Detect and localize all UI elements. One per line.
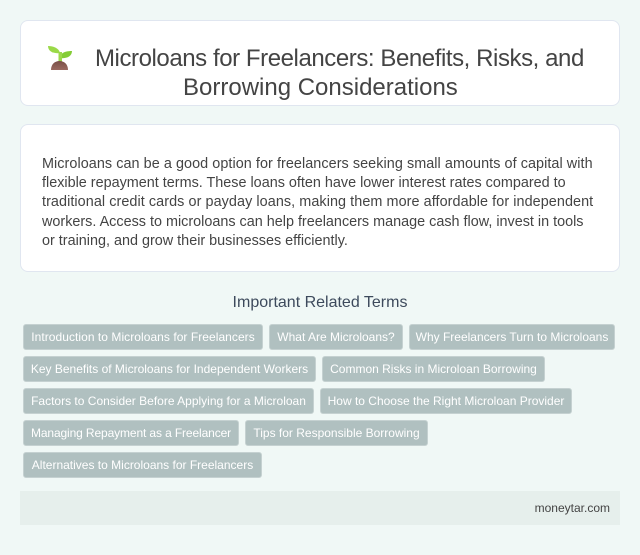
tag	[245, 420, 428, 446]
tag: Key Benefits of Microloans for Independent Workers	[31, 362, 308, 376]
text block: summary: workers. Access to microloans can help freelancers manage cash flow, invest in tools	[42, 214, 584, 230]
text block: summary: flexible repayment terms. These loans often have lower interest rates compared to	[42, 175, 566, 191]
tag	[23, 452, 262, 478]
panel: summary card	[20, 124, 620, 272]
tag: Common Risks in Microloan Borrowing	[330, 362, 537, 376]
tag: Alternatives to Microloans for Freelancers	[32, 458, 253, 472]
panel: title card	[20, 20, 620, 106]
tag	[23, 356, 316, 382]
footer text: source: moneytar.com	[535, 501, 610, 515]
tag: Why Freelancers Turn to Microloans	[416, 330, 608, 344]
tag	[23, 388, 314, 414]
text block: summary: or training, and grow their businesses efficiently.	[42, 233, 348, 249]
tag: Managing Repayment as a Freelancer	[31, 426, 231, 440]
heading: title: Borrowing Considerations	[183, 74, 458, 101]
tag	[320, 388, 572, 414]
tag	[23, 420, 239, 446]
tag	[23, 324, 263, 350]
heading: related terms: Important Related Terms	[233, 294, 407, 311]
tag: Tips for Responsible Borrowing	[253, 426, 420, 440]
footer bar	[20, 491, 620, 525]
panel: related term tags	[23, 324, 615, 478]
text block: summary	[42, 156, 594, 249]
heading: title	[95, 45, 584, 101]
tag: How to Choose the Right Microloan Provider	[328, 394, 564, 408]
icon: seedling	[48, 46, 72, 70]
tag: Factors to Consider Before Applying for a Microloan	[31, 394, 306, 408]
tag: What Are Microloans?	[277, 330, 395, 344]
heading: title: Microloans for Freelancers: Benefits, Risks, and	[95, 45, 584, 72]
tag	[322, 356, 545, 382]
tag	[409, 324, 615, 350]
text block: summary: Microloans can be a good option for freelancers seeking small amounts of capital with	[42, 156, 593, 172]
tag: Introduction to Microloans for Freelancers	[31, 330, 255, 344]
text block: summary: traditional credit cards or payday loans, making them more affordable for independent	[42, 194, 593, 210]
tag	[269, 324, 403, 350]
